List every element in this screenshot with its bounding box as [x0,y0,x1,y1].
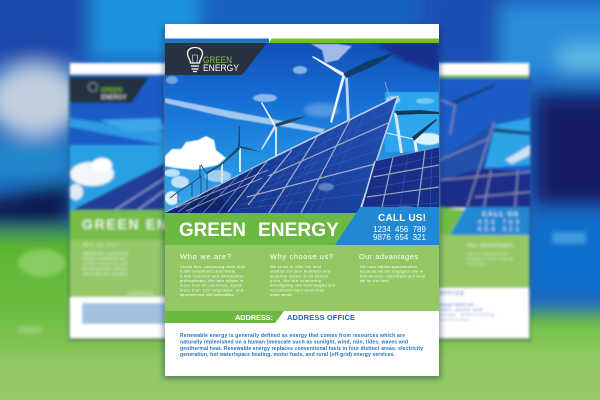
renewable energy paragraph: generation, hot water/space heating, motor fuels, and rural (off-grid) energy services. [180,352,396,358]
bright sky behind right turbines [385,92,439,152]
column: who we are: 2,000 research and information [180,273,243,278]
column: why choose us [270,252,335,297]
right background flyer (blurred): narrow specialization [467,251,509,256]
title [179,220,339,241]
right background flyer (blurred): 456 789 [478,219,519,226]
column: why choose us: investigating new technologies and [270,283,335,288]
right background flyer (blurred): energy which are [438,302,474,307]
main flyer [163,24,442,379]
flyer shadow [163,27,441,379]
logo wordmark: ENERGY [203,63,239,73]
column: why choose us: solution for your business and [270,269,330,274]
top colour strip [165,38,439,43]
column: why choose us: price. We are constantly [270,278,321,283]
left background flyer (blurred): Who we are? [83,242,119,247]
call us heading: CALL US! [378,213,426,224]
column: why choose us: impartial advice at an honest [270,273,329,278]
clouds [164,44,442,205]
right background flyer (blurred): tides, waves and [438,307,482,312]
faint blurred text in background [16,249,66,334]
right background flyer (blurred): engaged only in that we [467,256,515,261]
right background flyer (blurred): services. [438,317,471,322]
column: our advantages: We have narrow specialization, [360,264,418,269]
title: ENERGY [258,220,339,241]
column: our advantages [359,252,426,283]
left background flyer (blurred): ADDRESS: [127,291,155,296]
right background flyer (blurred): Our advantages [467,243,513,249]
right background flyer (blurred): CALL US [482,211,519,218]
renewable energy paragraph: geothermal heat. Renewable energy replaces conventional fuels in four distinct areas: electricity [180,346,423,352]
large wind turbine [312,51,398,123]
column: our advantages: that we love, understand and what [360,273,426,278]
renewable energy paragraph: Renewable energy is generally defined as energy that comes from resources which are [180,333,405,339]
left background flyer (blurred) [68,63,171,341]
column: who we are: represent over 100 nationalities. [180,292,235,297]
column: why choose us: recruitment them when they [270,287,324,292]
right background flyer (blurred): areas: electricity [438,312,494,317]
column: who we are: more than 60 countries, speak [180,283,242,288]
right wind turbines [385,82,439,153]
renewable energy paragraph: naturally replenished on a human timescale such as sunlight, wind, rain, tides, waves and [180,340,408,346]
column: our advantages: Our advantages [359,252,418,261]
left background flyer (blurred): ENERGY [101,95,126,101]
column: who we are: 6,000 consultants and nearly [180,269,235,274]
logo plate [165,43,267,75]
column: why choose us: make sense. [270,292,293,297]
phone numbers: 9876 654 321 [373,233,426,242]
small wind turbines [170,126,261,202]
title: GREEN [179,220,246,241]
dark sky corner [375,43,439,72]
right background flyer (blurred): the best. [467,261,487,266]
right background flyer (blurred) [430,63,531,341]
hero photo: wind turbines and solar panels [164,43,442,213]
column: who we are: Who we are? [180,252,231,261]
left background flyer (blurred): more than 60 countries [83,271,129,276]
address band: ADDRESS: [235,313,273,322]
column: who we are: professionals. We have offices in [180,278,243,283]
flyer sheet [165,24,439,376]
logo wordmark [203,55,239,73]
solar array: left rows [165,160,268,213]
phone numbers [373,225,426,242]
column: why choose us: We strive to offer the best [270,264,322,269]
left background flyer (blurred): GREEN EN [82,216,167,232]
content area: light green [165,245,439,311]
address band: ADDRESS OFFICE [287,313,355,322]
left background flyer (blurred): 2,000 research and [83,261,128,266]
unblurred ground fill along the bottom edge [0,345,600,400]
solar array: right panel [318,147,439,213]
column: why choose us: Why choose us? [270,252,333,261]
renewable energy paragraph [180,333,423,358]
solar array: main panel [228,96,398,213]
address band [165,311,355,323]
column: our advantages: because we are engaged only in [360,269,423,274]
column: who we are [180,252,245,297]
icon: light bulb [188,48,202,72]
logo wordmark: GREEN [203,55,232,65]
left background flyer (blurred): professionals offices [83,266,128,271]
middle wind turbine [261,102,307,158]
title band [165,213,358,245]
phone numbers: 1234 456 789 [373,225,426,234]
left background flyer (blurred): 6,000 consultants and [83,256,126,261]
column: our advantages: we do the best. [360,278,390,283]
right background flyer (blurred): 654 321 [478,226,519,233]
left background flyer (blurred): GREEN [101,88,122,94]
contact panel [335,207,439,245]
right background flyer (blurred): OFFICE [438,291,464,297]
column: who we are: Global firm, comprising more than [180,264,245,269]
left background flyer (blurred): Global firm, comprising [83,251,128,256]
column: who we are: more than 120 languages, and [180,287,243,292]
